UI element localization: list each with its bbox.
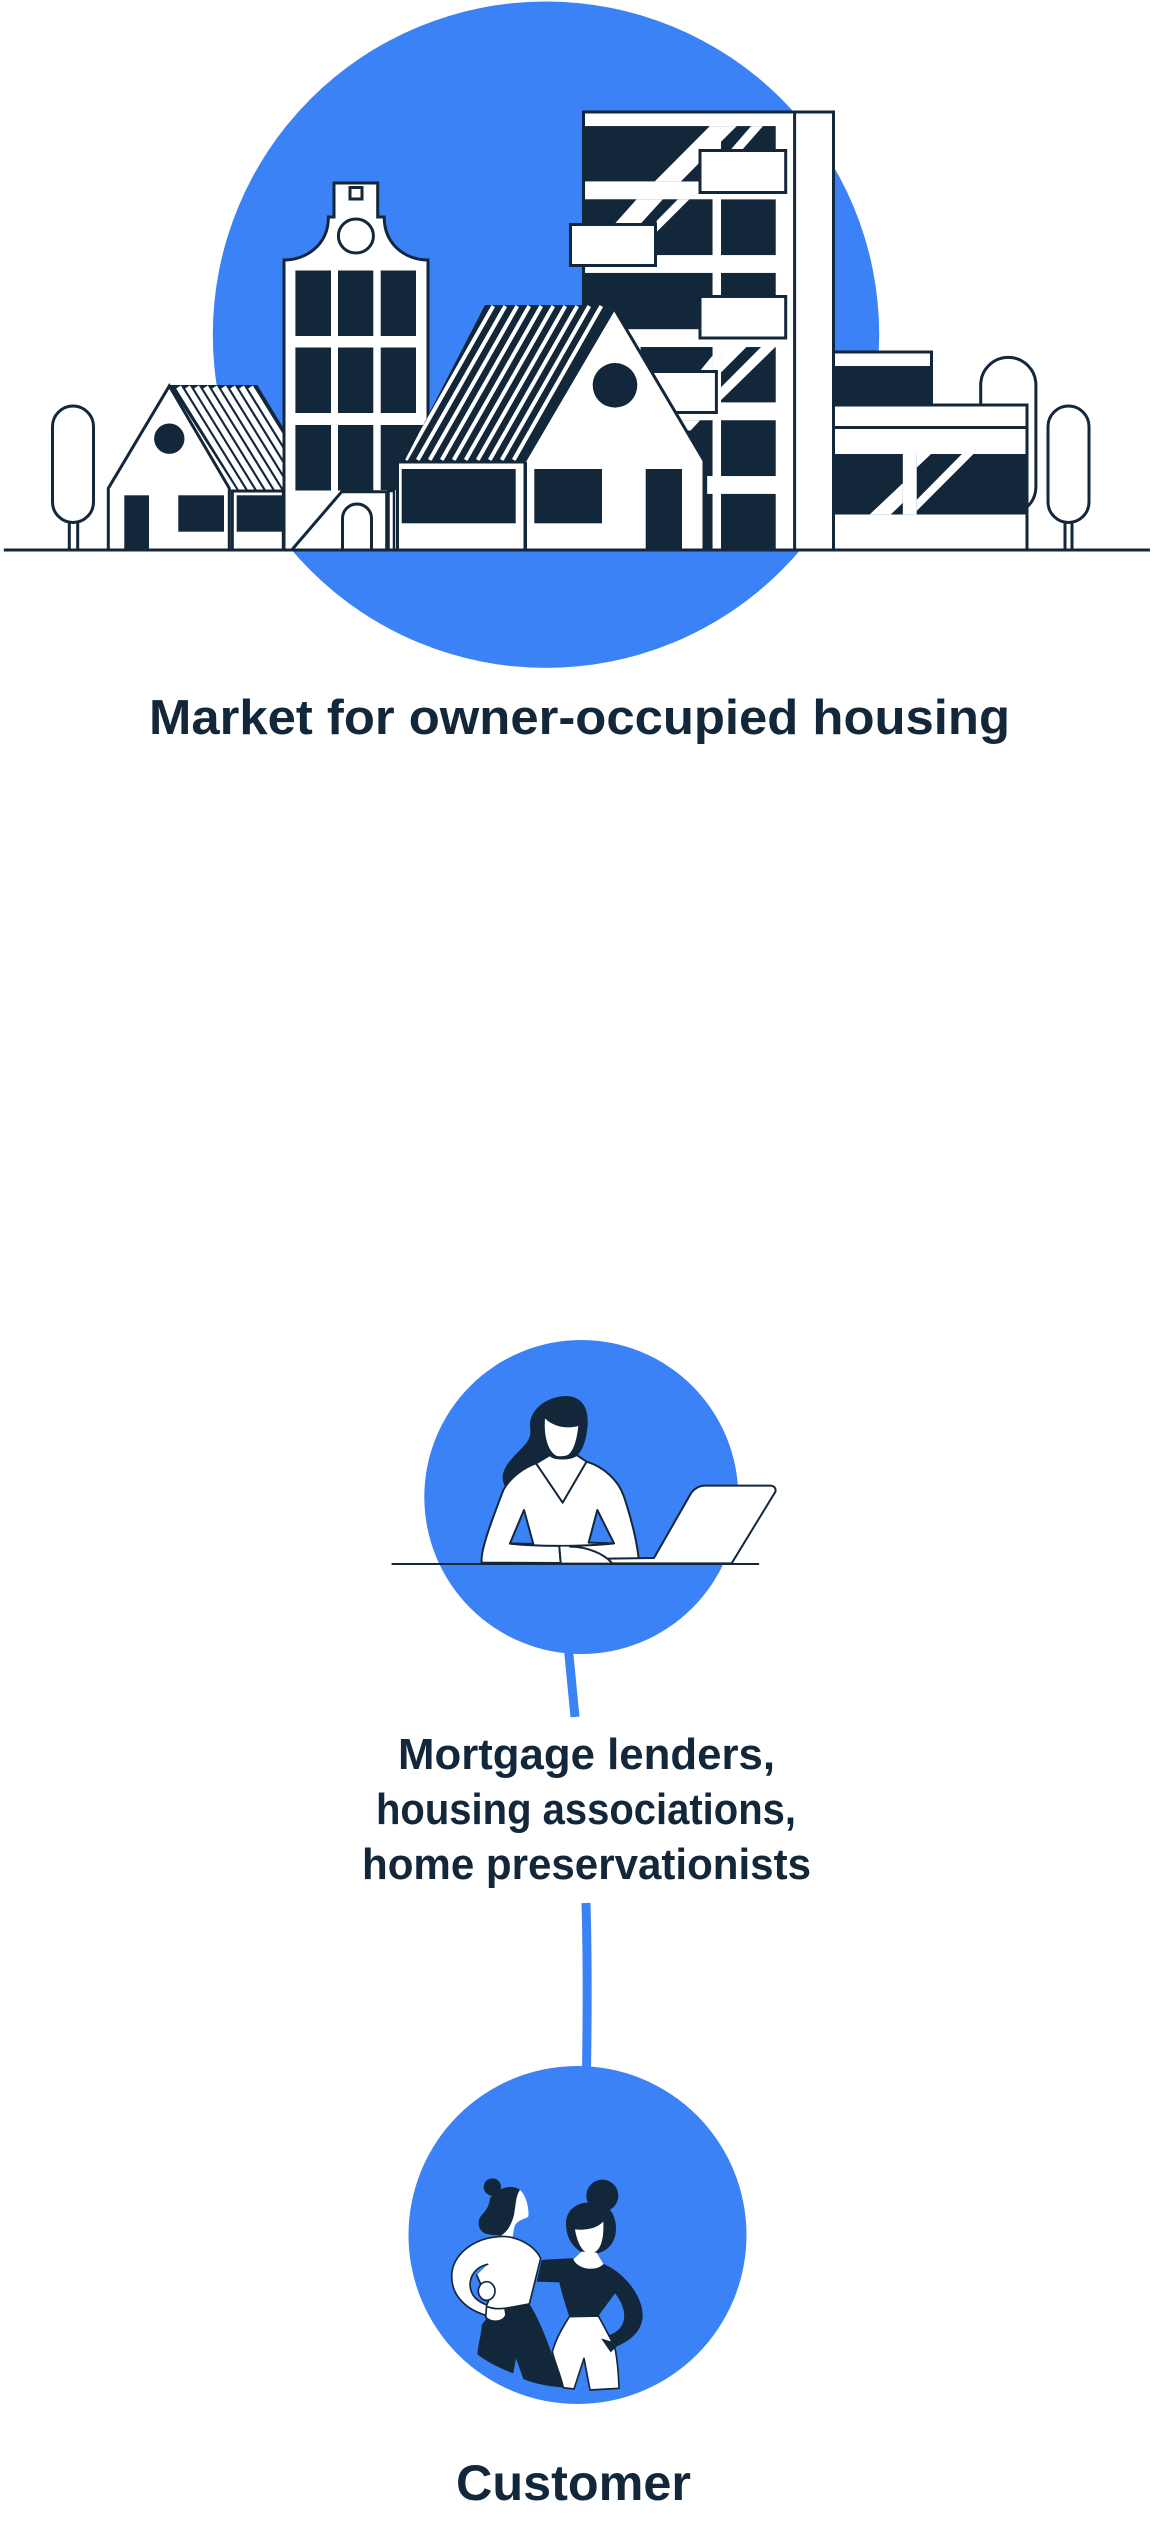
canal house [284,183,428,550]
laptop [608,1486,776,1563]
text: intermediaries [362,1730,811,1889]
small house roof [170,385,282,490]
apartment tower [582,112,834,550]
right arm gap [589,1510,614,1543]
line 1: Mortgage lenders, [398,1730,775,1779]
right person hand in pocket [601,2338,617,2352]
circle: lender [424,1340,738,1654]
large house roof [404,305,618,462]
title: market: Market for owner-occupied housing [149,691,1010,745]
left person hair [479,2178,520,2235]
background circle [213,2,879,668]
chin and neckline [536,1452,586,1503]
table line [392,1561,758,1567]
right tree [1048,406,1089,550]
line 2: housing associations, [376,1785,796,1834]
right person hair [566,2202,616,2253]
line 3: home preservationists [362,1840,811,1889]
icon: two customers [452,2178,643,2390]
left person arm gap [470,2264,488,2305]
buildings and trees [52,112,1089,550]
right person neck [573,2252,603,2269]
title: customer: Customer [456,2455,691,2511]
hand [559,1547,612,1563]
left person hand [478,2282,495,2300]
left person trousers [477,2304,563,2388]
right person face [575,2222,603,2253]
balconies [570,150,786,412]
small house [108,386,283,550]
circle: customer [408,2066,746,2404]
left person sleeve [486,2305,505,2317]
right low building [832,352,1028,550]
right person top [537,2258,643,2348]
icon: woman at laptop [392,1396,776,1564]
connector: lender to text [568,1650,575,1717]
hair [503,1396,588,1487]
hand outline [559,1547,612,1563]
ground line [4,548,1150,552]
large house [398,310,704,550]
right person trousers [552,2316,619,2390]
tree behind low building [981,357,1036,507]
torso [482,1455,640,1563]
illustration: housing market scene [4,2,1150,668]
left person face [499,2190,529,2237]
left person torso [452,2236,541,2321]
forearms [510,1543,614,1563]
left tree [52,406,94,550]
connector: text to customer [586,1903,587,2070]
face [545,1418,578,1457]
right person bun [586,2180,618,2212]
left arm gap [510,1510,533,1544]
